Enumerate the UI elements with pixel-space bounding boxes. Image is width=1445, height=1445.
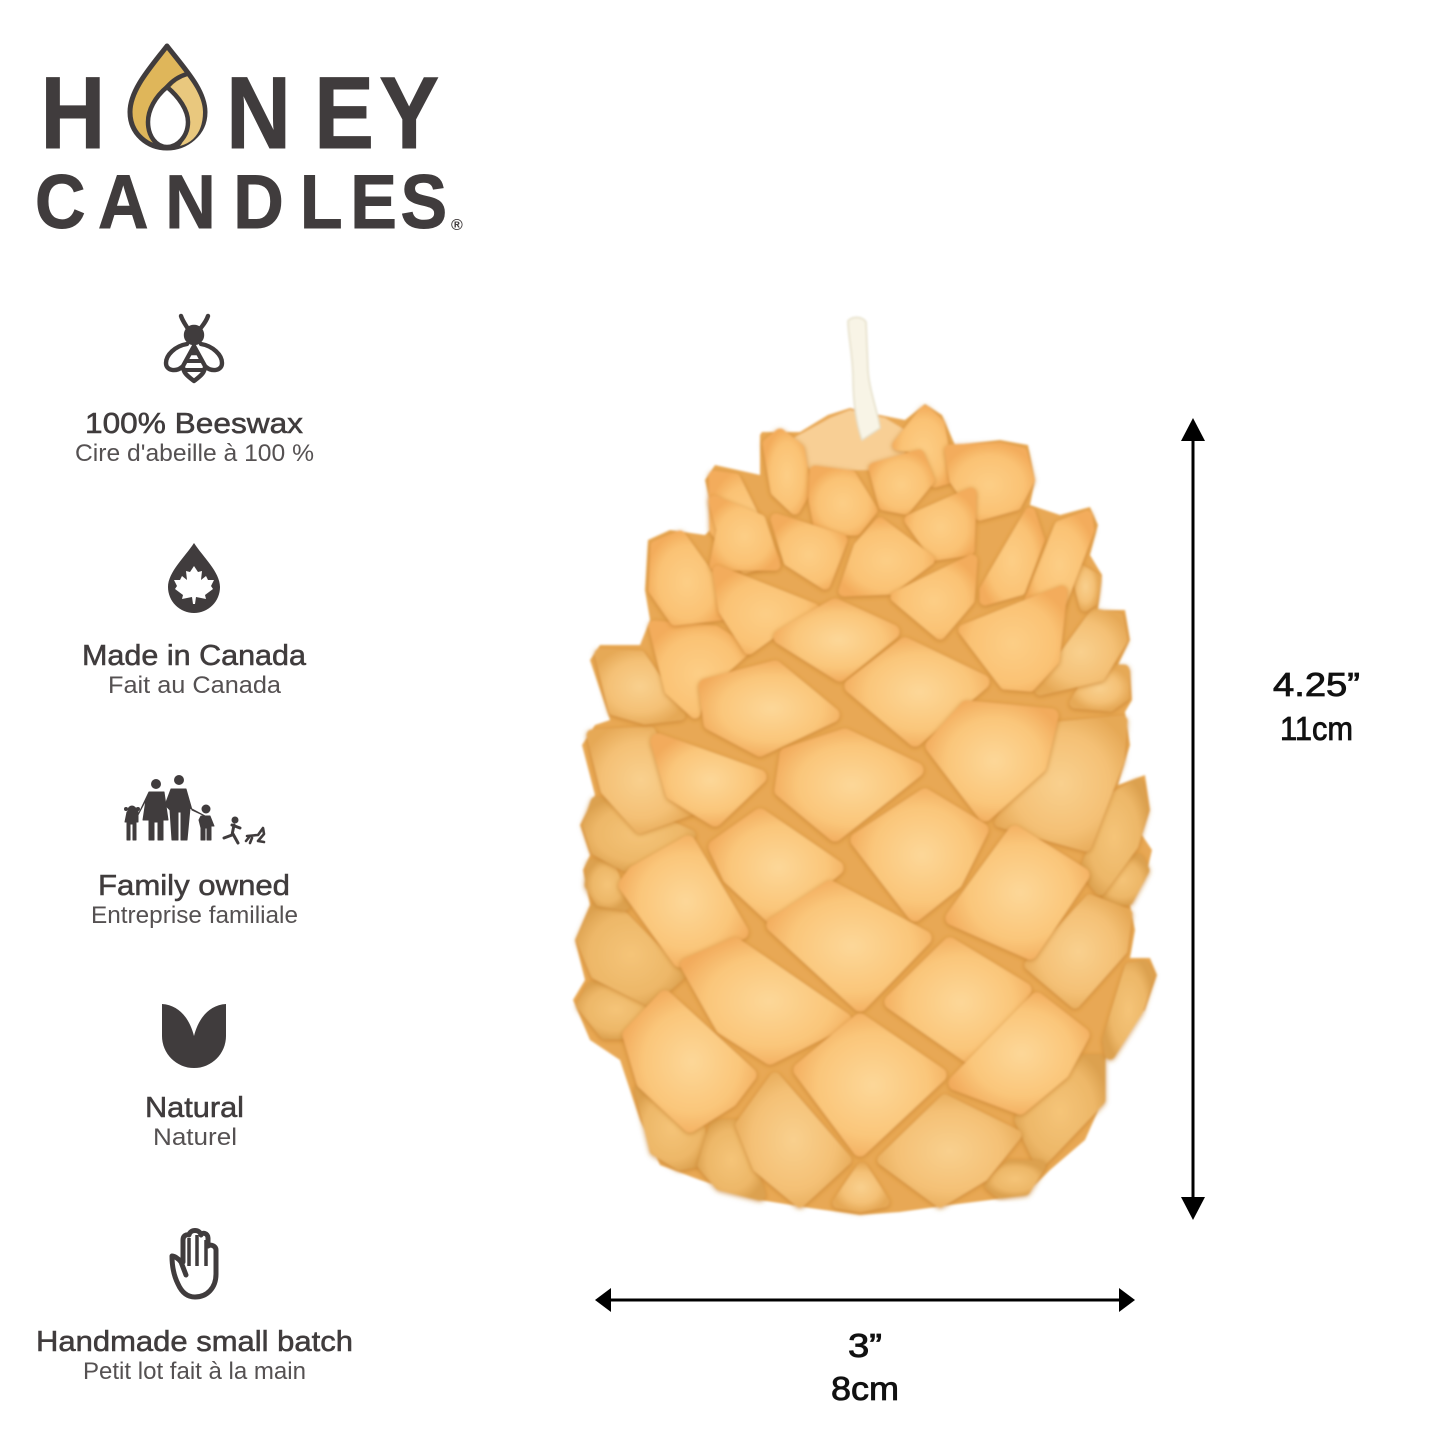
- icon: family silhouettes: [124, 775, 264, 843]
- width label: [831, 1327, 899, 1407]
- wick: [848, 317, 880, 440]
- icon: hand: [172, 1230, 216, 1297]
- feature: Handmade small batch: [36, 1230, 353, 1385]
- bottom front scales: [741, 1078, 1016, 1207]
- registered mark: ®: [451, 217, 463, 234]
- width in centimetres: 8cm: [831, 1370, 899, 1407]
- back scales: lower: [582, 784, 1149, 1195]
- mid scales: edges: [592, 567, 1127, 1003]
- logo wordmark: HONEY: HO NEY: [40, 57, 439, 170]
- width dimension arrow: [595, 1288, 1135, 1312]
- feature: Made in Canada: [82, 543, 307, 699]
- logo wordmark: CANDLES: CANDLES: [35, 160, 447, 245]
- icon: drop with maple leaf: [168, 543, 220, 613]
- heading: Family owned: [98, 870, 290, 902]
- candle silhouette: [573, 404, 1157, 1215]
- icon: bee: [166, 316, 222, 381]
- subheading: Entreprise familiale: [91, 902, 298, 929]
- subheading: Fait au Canada: [108, 672, 282, 699]
- logo: Honey Candles: [35, 46, 463, 245]
- product photo: pine cone candle: [573, 317, 1157, 1215]
- heading: Natural: [145, 1092, 244, 1124]
- feature: 100% Beeswax: [75, 316, 314, 467]
- subheading: Naturel: [153, 1124, 237, 1151]
- subheading: Petit lot fait à la main: [83, 1358, 306, 1385]
- upper scales: [654, 411, 1089, 713]
- logo icon: flame drop: [130, 46, 205, 148]
- width in inches: 3”: [848, 1327, 882, 1364]
- height dimension arrow: [1181, 418, 1205, 1220]
- heading: 100% Beeswax: [85, 408, 304, 440]
- wax top cap: [790, 410, 905, 470]
- subheading: Cire d'abeille à 100 %: [75, 440, 314, 467]
- height in inches: 4.25”: [1273, 666, 1360, 703]
- heading: Made in Canada: [82, 640, 307, 672]
- height in centimetres: 11cm: [1280, 710, 1353, 747]
- icon: tulip leaves: [162, 1004, 226, 1068]
- feature: Family owned: [91, 775, 298, 929]
- height label: [1273, 666, 1360, 747]
- front scales: [626, 606, 1082, 1149]
- heading: Handmade small batch: [36, 1326, 353, 1358]
- feature: Natural: [145, 1004, 244, 1151]
